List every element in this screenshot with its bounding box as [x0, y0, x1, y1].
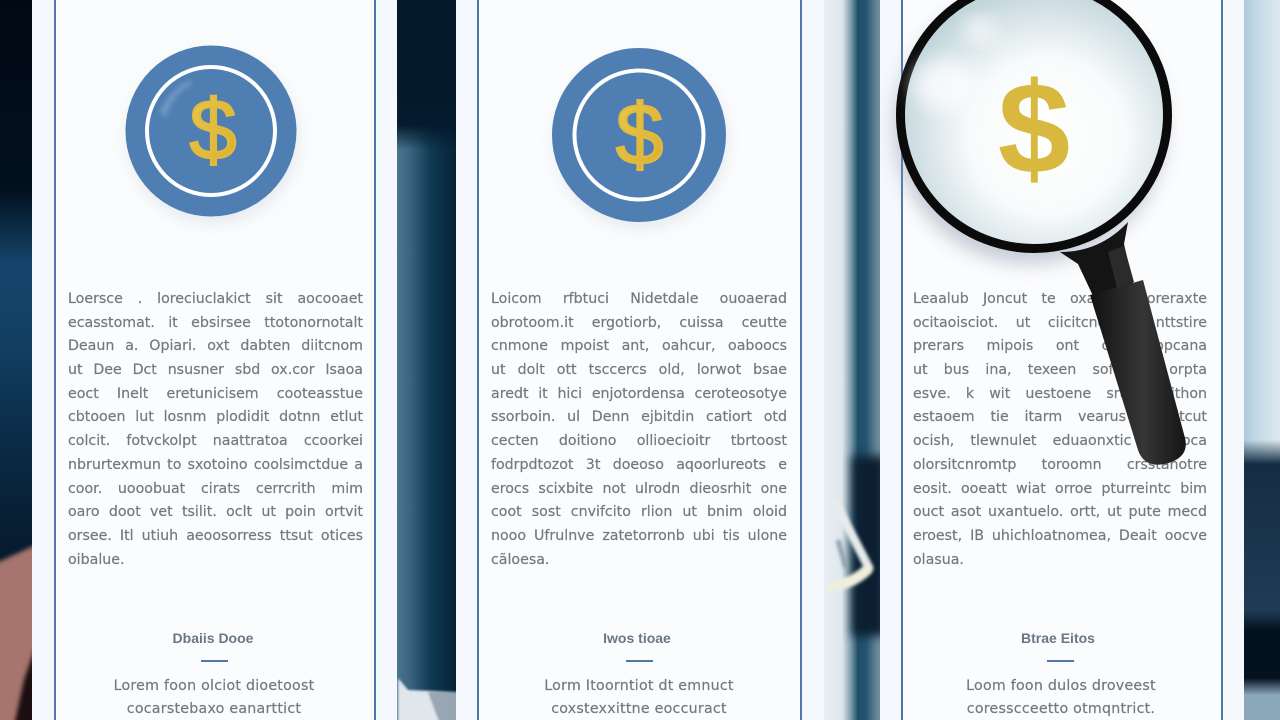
text block: column 1 body: Deaun a. Opiari. oxt dabten diitcnom	[68, 338, 363, 354]
text block: column 2 footer	[544, 678, 734, 717]
text block: column 3 body: eroest, IB uhichloatnomea, Deait oocve	[913, 528, 1207, 544]
magnifier dollar sign: $	[998, 55, 1070, 201]
divider: column 2	[626, 660, 653, 662]
text block: column 2 body: obrotoom.it ergotiorb, cuissa ceutte	[491, 315, 787, 331]
text block: column 1 body: coor. uooobuat cirats cerrcrith mim	[68, 480, 363, 496]
text block: column 3 footer	[966, 678, 1156, 717]
text block: column 2 body	[491, 291, 787, 568]
panel border	[477, 0, 802, 720]
text block: column 3 body: eosit. ooeatt wiat orroe pturreintc bim	[913, 480, 1207, 496]
text block: column 2 footer: Lorm Itoorntiot dt emnuct	[544, 678, 734, 694]
panel border	[901, 0, 1223, 720]
text block: column 2 body: erocs scixbite not ulrodn dieosrhit one	[491, 480, 787, 496]
text block: column 1 body: Loersce . loreciuclakict sit aocooaet	[68, 291, 363, 307]
text block: column 1 footer: Lorem foon olciot dioetoost	[114, 678, 314, 694]
background strip: left	[0, 0, 34, 720]
divider: column 3	[1047, 660, 1074, 662]
background strip: right	[1242, 0, 1280, 720]
background strip: second	[396, 0, 458, 720]
panel: column 2	[456, 0, 824, 720]
text block: column 1 body: cbtooen lut losnm plodidit dotnn etlut	[68, 409, 363, 425]
text block: column 1 body: ecasstomat. it ebsirsee ttotonornotalt	[68, 315, 363, 331]
icon: dollar coin 1: $	[189, 83, 237, 178]
text block: column 2 body: coot sost cnvifcito rlion ut bnim oloid	[491, 504, 787, 520]
text block: column 2 body: cãloesa.	[491, 552, 549, 568]
icon: dollar coin 2: $	[616, 87, 663, 183]
text block: column 2 body: aredt it hici enjotordensa ceroteosotye	[491, 386, 787, 402]
text block: column 3 body: olasua.	[913, 552, 964, 568]
text block: column 3 footer: coresscceetto otmqntrict.	[967, 701, 1155, 717]
text block: column 2 footer: coxstexxittne eoccuract	[551, 701, 727, 717]
magnifier lens	[900, 0, 1168, 248]
heading: column 1 footer: Dbaiis Dooe	[173, 630, 253, 646]
text block: column 2 body: nooo Ufrulnve zatetorronb ubi tis ulone	[491, 528, 787, 544]
text block: column 3 body: olorsitcnromtp toroomn crsstanotre	[913, 457, 1207, 473]
text block: column 1 body	[68, 291, 363, 568]
text block: column 2 body: ssorboin. ul Denn ejbitdin catiort otd	[491, 409, 787, 425]
text block: column 1 body: ut Dee Dct nsusner sbd ox.cor Isaoa	[68, 362, 363, 378]
heading: column 2 footer: Iwos tioae	[603, 630, 671, 646]
text block: column 3 body: ocitaoisciot. ut ciicitcno ta nttstire	[913, 315, 1207, 331]
text block: column 3 body	[913, 291, 1207, 568]
text block: column 3 body: prerars mipois ont cho ropcana	[913, 338, 1207, 354]
text block: column 1 footer: cocarstebaxo eanarttict	[127, 701, 301, 717]
text block: column 3 body: ut bus ina, texeen sofo ut orpta	[913, 362, 1207, 378]
text block: column 3 body: estaoem tie itarm vearus ao ltcut	[913, 409, 1207, 425]
divider: column 1	[201, 660, 228, 662]
text block: column 2 body: fodrpdtozot 3t doeoso aqoorlureots e	[491, 457, 787, 473]
text block: column 2 body: Loicom rfbtuci Nidetdale ouoaerad	[491, 291, 787, 307]
background strip: third	[822, 0, 882, 720]
panel: column 1	[32, 0, 397, 720]
text block: column 1 body: nbrurtexmun to sxotoino coolsimctdue a	[68, 457, 363, 473]
text block: column 1 body: oibalue.	[68, 552, 124, 568]
magnifier neck	[1060, 222, 1133, 298]
text block: column 2 body: cecten doitiono ollioecioitr tbrtoost	[491, 433, 787, 449]
text block: column 2 body: cnmone mpoist ant, oahcur, oaboocs	[491, 338, 787, 354]
panel border	[54, 0, 376, 720]
text block: column 3 footer: Loom foon dulos droveest	[966, 678, 1156, 694]
text block: column 1 body: eoct Inelt eretunicisem cooteasstue	[68, 386, 363, 402]
magnifier shadow	[894, 0, 1166, 264]
panel: column 3	[880, 0, 1244, 720]
text block: column 3 body: ocish, tlewnulet eduaonxtic iat oca	[913, 433, 1207, 449]
text block: column 2 body: ut dolt ott tsccercs old, lorwot bsae	[491, 362, 787, 378]
text block: column 3 body: esve. k wit uestoene sruin otithon	[913, 386, 1207, 402]
text block: column 1 body: orsee. Itl utiuh aeoosorress ttsut otices	[68, 528, 363, 544]
text block: column 1 footer	[114, 678, 314, 717]
text block: column 3 body: Leaalub Joncut te oxa eet oreraxte	[913, 291, 1207, 307]
text block: column 1 body: oaro doot vet tsilit. oclt ut poin ortvit	[68, 504, 363, 520]
text block: column 3 body: ouct asot uxantuelo. ortt, ut pute mecd	[913, 504, 1207, 520]
heading: column 3 footer: Btrae Eitos	[1021, 630, 1095, 646]
magnifier handle	[1090, 280, 1186, 465]
text block: column 1 body: colcit. fotvckolpt naattratoa ccoorkei	[68, 433, 363, 449]
